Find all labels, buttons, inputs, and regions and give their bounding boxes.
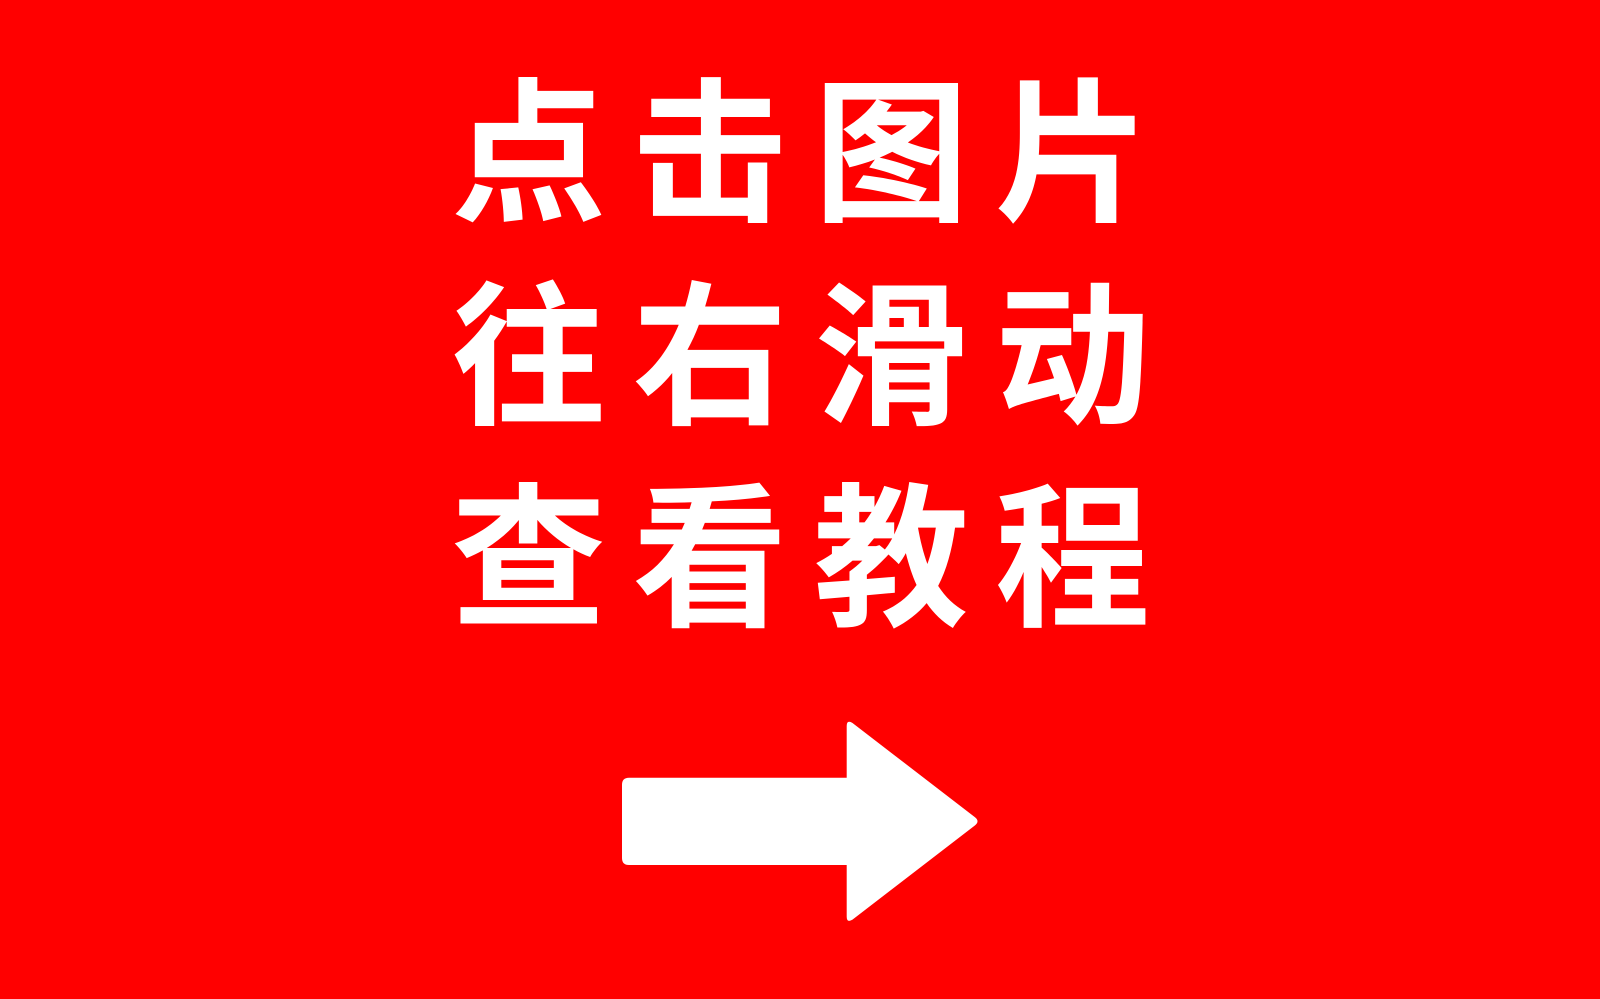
heading line 1: 点击图片 [451, 68, 1176, 242]
heading line 2: 往右滑动 [451, 271, 1176, 445]
heading line 3: 查看教程 [451, 473, 1176, 647]
